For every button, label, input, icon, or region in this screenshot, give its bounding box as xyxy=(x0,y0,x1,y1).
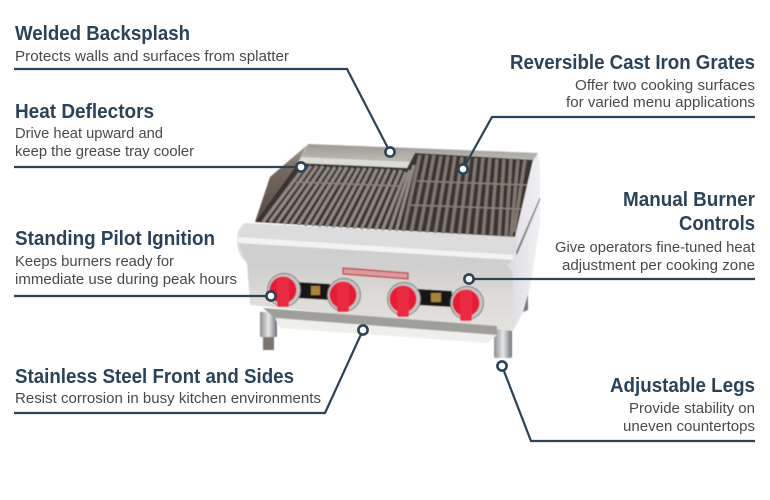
callout: Manual Burner Controls: adjustment per cooking zone xyxy=(562,258,755,274)
knob 4 xyxy=(450,286,484,321)
callout: Stainless Steel Front and Sides: Stainless Steel Front and Sides xyxy=(15,366,294,388)
front rail xyxy=(237,223,517,266)
brand plate xyxy=(343,268,408,279)
callout: Reversible Cast Iron Grates: Reversible Cast Iron Grates xyxy=(510,52,755,74)
right side panel xyxy=(508,153,540,331)
backsplash xyxy=(298,144,538,168)
callout: Standing Pilot Ignition: Keeps burners ready for xyxy=(15,254,174,270)
callout: Adjustable Legs: Adjustable Legs xyxy=(610,375,755,397)
grease tray xyxy=(263,308,497,343)
callout: Reversible Cast Iron Grates xyxy=(458,52,755,174)
right grate bars xyxy=(403,155,525,237)
callout: Manual Burner Controls xyxy=(464,189,755,284)
callout: Reversible Cast Iron Grates: Offer two cooking surfaces xyxy=(575,78,755,94)
callout: Stainless Steel Front and Sides xyxy=(14,325,368,413)
burner windows xyxy=(296,282,452,307)
callout: Welded Backsplash: Protects walls and surfaces from splatter xyxy=(15,49,289,65)
legs xyxy=(260,292,528,358)
callout: Adjustable Legs: uneven countertops xyxy=(623,419,755,435)
callout: Heat Deflectors xyxy=(14,101,306,172)
callout: Standing Pilot Ignition xyxy=(14,228,276,301)
knob 3 xyxy=(388,282,420,317)
grate cross bars xyxy=(296,181,527,209)
callout: Heat Deflectors: Drive heat upward and xyxy=(15,126,163,142)
callout: Standing Pilot Ignition: Standing Pilot Ignition xyxy=(15,228,215,250)
callout: Adjustable Legs: Provide stability on xyxy=(629,401,755,417)
callout: Stainless Steel Front and Sides: Resist corrosion in busy kitchen environments xyxy=(15,391,321,407)
knob 2 xyxy=(328,278,360,312)
callout: Heat Deflectors: Heat Deflectors xyxy=(15,101,154,123)
left grate bars xyxy=(263,165,414,232)
left side deflector xyxy=(255,145,307,222)
callout: Standing Pilot Ignition: immediate use during peak hours xyxy=(15,272,237,288)
callout: Welded Backsplash: Welded Backsplash xyxy=(15,23,190,45)
product: charbroiler xyxy=(237,144,540,358)
knob 1 xyxy=(268,274,300,307)
callout: Reversible Cast Iron Grates: for varied menu applications xyxy=(566,95,755,111)
callout: Welded Backsplash xyxy=(14,23,395,157)
callout: Adjustable Legs xyxy=(497,361,755,441)
callout: Manual Burner Controls: Controls xyxy=(679,213,755,235)
callout: Manual Burner Controls: Manual Burner xyxy=(623,189,755,211)
callout: Manual Burner Controls: Give operators fine-tuned heat xyxy=(555,240,755,256)
control panel xyxy=(247,263,513,331)
callout: Heat Deflectors: keep the grease tray cooler xyxy=(15,144,194,160)
grate bed xyxy=(255,153,533,237)
